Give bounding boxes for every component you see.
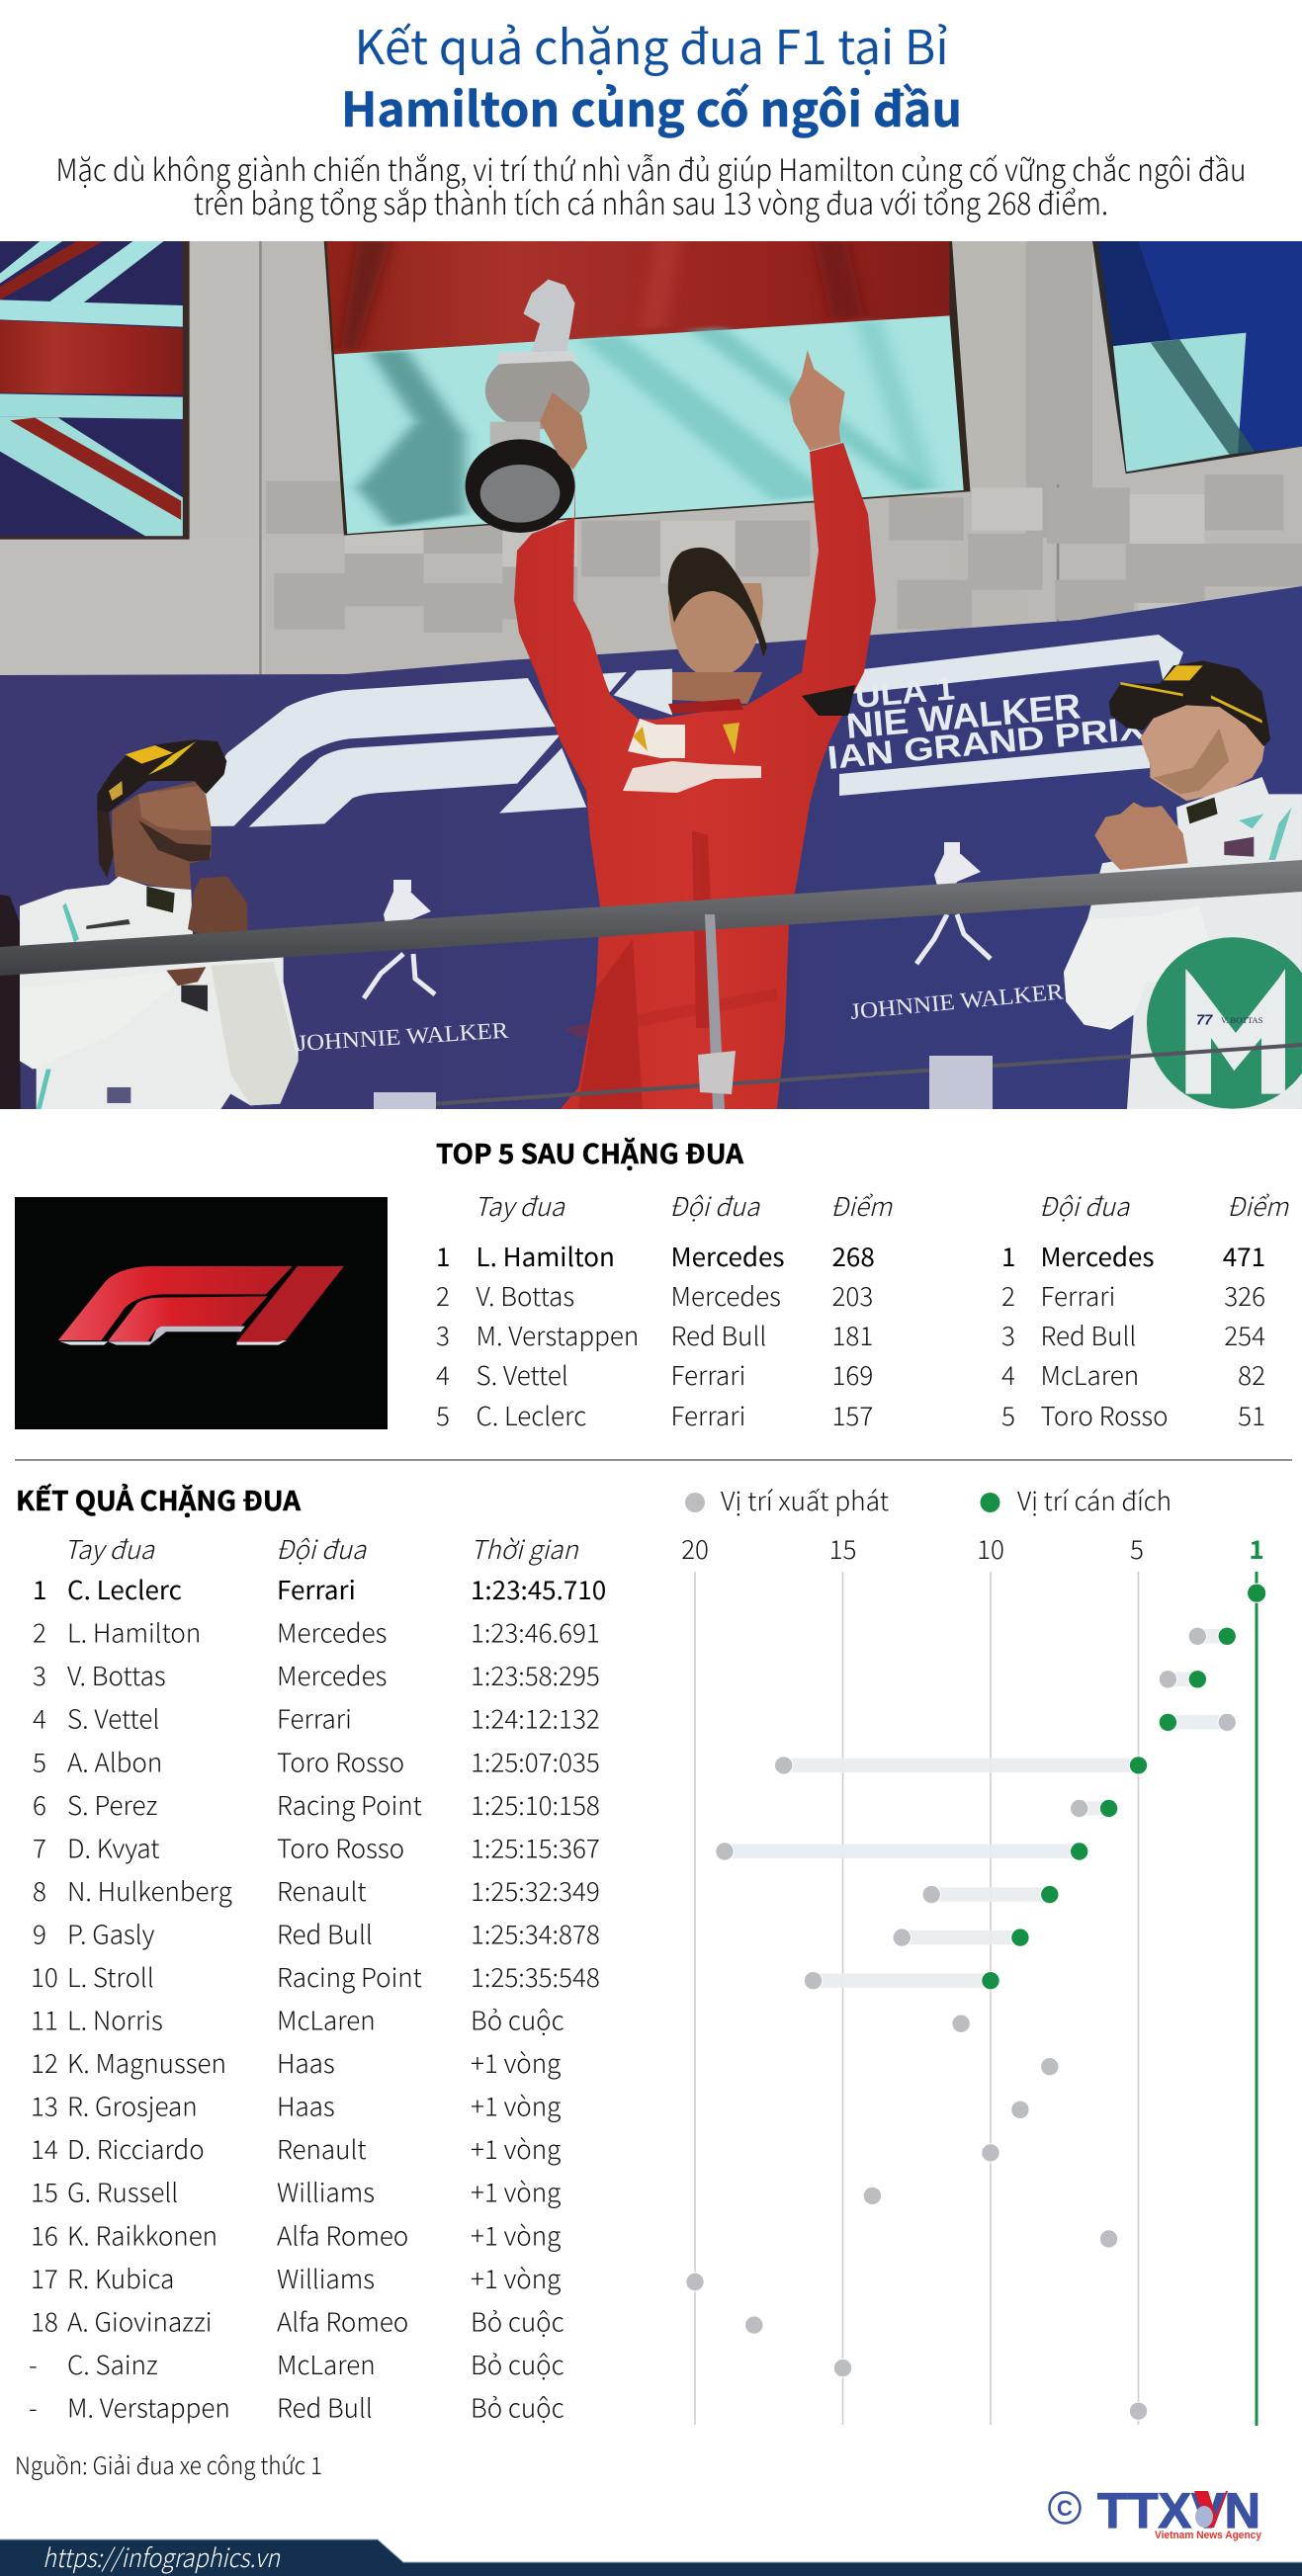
results table: - — [29, 2346, 38, 2382]
constructors top 5 table: Mercedes — [1040, 1238, 1155, 1274]
results table: Williams — [277, 2174, 375, 2210]
intro text block — [55, 145, 1246, 223]
results table: D. Ricciardo — [67, 2130, 205, 2167]
finish position dots — [982, 1584, 1266, 1990]
drivers top 5 table: 169 — [832, 1356, 873, 1393]
results table: Haas — [277, 2044, 335, 2081]
striding man left — [364, 880, 435, 998]
drivers top 5 table: Tay đua — [475, 1187, 565, 1224]
constructors top 5 table: 326 — [1224, 1277, 1265, 1314]
banner lettering: NIE WALKER — [844, 685, 1083, 746]
results table: Bỏ cuộc — [471, 2388, 564, 2426]
constructors top 5 table: 3 — [1001, 1317, 1015, 1353]
title — [341, 9, 962, 140]
constructors top 5 table — [1001, 1187, 1290, 1433]
title: Hamilton củng cố ngôi đầu — [341, 71, 962, 140]
results table: Ferrari — [277, 1700, 352, 1737]
results table: 15 — [31, 2174, 58, 2210]
results table: Toro Rosso — [277, 1744, 404, 1779]
results table: D. Kvyat — [67, 1829, 159, 1865]
drivers top 5 table: Đội đua — [669, 1187, 760, 1224]
axis labels: 15 — [829, 1530, 856, 1567]
range bars — [725, 1629, 1227, 1988]
results table: 18 — [31, 2302, 58, 2339]
results table: Red Bull — [277, 2388, 373, 2426]
results table: N. Hulkenberg — [67, 1872, 232, 1909]
constructors top 5 table: Red Bull — [1040, 1317, 1136, 1353]
monaco flag screen — [324, 241, 970, 536]
drivers top 5 table: L. Hamilton — [477, 1238, 615, 1274]
striding man right — [916, 842, 991, 964]
axis labels: 20 — [681, 1530, 709, 1567]
results table: V. Bottas — [67, 1657, 166, 1693]
driver: C. Leclerc — [466, 280, 876, 1109]
Johnnie Walker branding: JOHNNIE WALKER — [297, 1018, 510, 1056]
footer bar: https://infographics.vn — [43, 2538, 281, 2575]
results table: +1 vòng — [471, 2216, 561, 2253]
results table: 2 — [33, 1614, 46, 1651]
results table header: Đội đua — [276, 1530, 367, 1567]
results table: 17 — [31, 2260, 58, 2296]
trophy — [466, 280, 590, 533]
results table: Ferrari — [277, 1571, 356, 1607]
results table: M. Verstappen — [67, 2388, 230, 2426]
Johnnie Walker branding — [297, 842, 1065, 1056]
results table: Red Bull — [277, 1915, 373, 1951]
results table: Mercedes — [277, 1657, 387, 1693]
constructors top 5 table: 254 — [1224, 1317, 1265, 1353]
constructors top 5 table: 5 — [1001, 1397, 1015, 1433]
results table: K. Raikkonen — [67, 2216, 217, 2253]
results table: A. Albon — [67, 1744, 162, 1779]
results table: Bỏ cuộc — [471, 2302, 564, 2339]
banner background — [0, 586, 1302, 1109]
drivers top 5 table: Điểm — [830, 1187, 894, 1224]
constructors top 5 table: Toro Rosso — [1040, 1397, 1169, 1433]
head and neck — [668, 583, 763, 678]
results table: - — [29, 2388, 38, 2426]
banner: right stripes — [821, 635, 1183, 796]
drivers top 5 table: C. Leclerc — [477, 1397, 586, 1433]
drivers top 5 table: Mercedes — [670, 1238, 785, 1274]
drivers top 5 table: 157 — [832, 1397, 873, 1433]
legend: Vị trí cán đích — [1017, 1482, 1172, 1518]
drivers top 5 table: Ferrari — [670, 1397, 745, 1433]
right flag screen — [1092, 241, 1302, 473]
axis labels: 1 — [1249, 1530, 1264, 1567]
results table: A. Giovinazzi — [67, 2302, 212, 2339]
constructors top 5 table: 82 — [1238, 1356, 1265, 1393]
suit shading — [564, 830, 777, 1109]
results table: +1 vòng — [471, 2044, 561, 2081]
results table — [29, 1571, 606, 2426]
results table: 1:24:12:132 — [471, 1700, 600, 1737]
podium rail — [0, 860, 1302, 1109]
results table: Renault — [277, 2130, 367, 2167]
banner lettering — [828, 683, 1143, 769]
results table: 1:25:32:349 — [471, 1872, 600, 1909]
results table: R. Kubica — [67, 2260, 174, 2296]
armband and collar — [802, 685, 855, 716]
results table: 6 — [33, 1786, 46, 1823]
results table: 7 — [33, 1829, 46, 1865]
driver: L. Hamilton — [0, 739, 299, 1109]
source note: Nguồn: Giải đua xe công thức 1 — [15, 2447, 322, 2481]
results table: 12 — [31, 2044, 58, 2081]
results table: 10 — [31, 1958, 58, 1995]
results table: R. Grosjean — [67, 2088, 198, 2124]
TTXVN logo: C — [1057, 2496, 1073, 2521]
results table: L. Norris — [67, 2001, 163, 2038]
drivers top 5 table: 203 — [832, 1277, 873, 1314]
results table: Haas — [277, 2088, 335, 2124]
footer bar — [0, 2538, 1302, 2576]
section heading: race results: KẾT QUẢ CHẶNG ĐUA — [16, 1480, 302, 1518]
axis labels: 10 — [977, 1530, 1004, 1567]
results table: Alfa Romeo — [277, 2302, 408, 2339]
drivers top 5 table: Mercedes — [670, 1277, 781, 1314]
drivers top 5 table: 4 — [436, 1356, 450, 1393]
results table: McLaren — [277, 2346, 376, 2382]
driver: V. Bottas — [1064, 660, 1302, 1109]
results table: 1:23:45.710 — [471, 1571, 606, 1607]
constructors top 5 table: Đội đua — [1039, 1187, 1130, 1224]
results table: McLaren — [277, 2001, 376, 2038]
wall and flag screens — [0, 241, 1302, 677]
results table: 4 — [33, 1700, 46, 1737]
F1 logo panel — [15, 1197, 388, 1429]
raised hands — [540, 350, 845, 470]
drivers top 5 table: M. Verstappen — [477, 1317, 639, 1353]
results table: 8 — [33, 1872, 46, 1909]
results table: Racing Point — [277, 1958, 422, 1995]
axis labels: 5 — [1130, 1530, 1144, 1567]
race suit — [514, 443, 876, 1109]
results table: Williams — [277, 2260, 375, 2296]
results table: 1:25:34:878 — [471, 1915, 600, 1951]
results table: C. Leclerc — [67, 1571, 182, 1607]
results table: +1 vòng — [471, 2174, 561, 2210]
results table: C. Sainz — [67, 2346, 158, 2382]
drivers top 5 table: 3 — [436, 1317, 450, 1353]
section heading: top 5: TOP 5 SAU CHẶNG ĐUA — [436, 1133, 744, 1171]
drivers top 5 table: 1 — [436, 1238, 450, 1274]
drivers top 5 table: 5 — [436, 1397, 450, 1433]
results table: 11 — [31, 2001, 58, 2038]
drivers top 5 table: S. Vettel — [477, 1356, 568, 1393]
drivers top 5 table: 268 — [832, 1238, 875, 1274]
banner: F1 logo — [171, 669, 672, 827]
results table: 1:25:07:035 — [471, 1744, 600, 1779]
results table: Racing Point — [277, 1786, 422, 1823]
results table: 1:23:58:295 — [471, 1657, 600, 1693]
axis labels — [681, 1530, 1264, 1567]
results table: S. Vettel — [67, 1700, 159, 1737]
drivers top 5 table: Ferrari — [670, 1356, 745, 1393]
TTXVN logo: Vietnam News Agency — [1155, 2530, 1262, 2541]
results table: L. Hamilton — [67, 1614, 201, 1651]
banner lettering: IAN GRAND PRIX — [825, 709, 1146, 776]
results table: 9 — [33, 1915, 46, 1951]
legend — [685, 1482, 1172, 1518]
results table: 14 — [31, 2130, 58, 2167]
title: Kết quả chặng đua F1 tại Bỉ — [354, 9, 949, 78]
results table: S. Perez — [67, 1786, 158, 1823]
results table: +1 vòng — [471, 2260, 561, 2296]
results table: 5 — [33, 1744, 46, 1779]
results table header: Tay đua — [64, 1530, 155, 1567]
results table: K. Magnussen — [67, 2044, 226, 2081]
results table: 1:25:10:158 — [471, 1786, 600, 1823]
results table: 1 — [33, 1571, 46, 1607]
results table: 3 — [33, 1657, 46, 1693]
results table: 1:25:35:548 — [471, 1958, 600, 1995]
results table: Renault — [277, 1872, 367, 1909]
results table header: Thời gian — [471, 1530, 579, 1567]
results table header — [64, 1530, 579, 1567]
TTXVN logo: TTXVN — [1097, 2483, 1260, 2538]
drivers top 5 table: 181 — [832, 1317, 873, 1353]
constructors top 5 table: Điểm — [1227, 1187, 1290, 1224]
results table: Bỏ cuộc — [471, 2346, 564, 2382]
constructors top 5 table: 51 — [1238, 1397, 1265, 1433]
chest sponsors — [623, 719, 761, 793]
results table: 1:23:46.691 — [471, 1614, 600, 1651]
constructors top 5 table: 4 — [1001, 1356, 1015, 1393]
green watermark circle — [1147, 937, 1302, 1109]
results table: +1 vòng — [471, 2088, 561, 2124]
photo: podium — [0, 241, 1302, 1109]
constructors top 5 table: 471 — [1223, 1238, 1265, 1274]
results table: Mercedes — [277, 1614, 387, 1651]
results table: P. Gasly — [67, 1915, 155, 1951]
drivers top 5 table: Red Bull — [670, 1317, 766, 1353]
start position dots — [686, 1627, 1236, 2420]
union flag screen — [0, 241, 190, 540]
driver: V. Bottas: V. BOTTAS — [1221, 1015, 1263, 1025]
watermark M — [1185, 969, 1285, 1094]
banner lettering: ULA 1 — [853, 669, 956, 715]
results table: Alfa Romeo — [277, 2216, 408, 2253]
results table: 1:25:15:367 — [471, 1829, 600, 1865]
driver: V. Bottas: 77 — [1196, 1013, 1213, 1029]
position chart — [681, 1530, 1266, 2426]
constructors top 5 table: 1 — [1001, 1238, 1015, 1274]
results table: L. Stroll — [67, 1958, 154, 1995]
drivers top 5 table: V. Bottas — [477, 1277, 574, 1314]
results table: +1 vòng — [471, 2130, 561, 2167]
Johnnie Walker branding: JOHNNIE WALKER — [849, 979, 1065, 1024]
intro text block: trên bảng tổng sắp thành tích cá nhân sau 13 vòng đua với tổng 268 điểm. — [194, 179, 1108, 223]
constructors top 5 table: 2 — [1001, 1277, 1015, 1314]
results table: 16 — [31, 2216, 58, 2253]
results table: 13 — [31, 2088, 58, 2124]
drivers top 5 table — [436, 1187, 894, 1433]
constructors top 5 table: Ferrari — [1040, 1277, 1115, 1314]
results table: G. Russell — [67, 2174, 178, 2210]
results table: Toro Rosso — [277, 1829, 404, 1865]
drivers top 5 table: 2 — [436, 1277, 450, 1314]
constructors top 5 table: McLaren — [1040, 1356, 1139, 1393]
legend: Vị trí xuất phát — [721, 1482, 889, 1518]
results table: Bỏ cuộc — [471, 2001, 564, 2038]
thin podium rail — [374, 1043, 1302, 1109]
